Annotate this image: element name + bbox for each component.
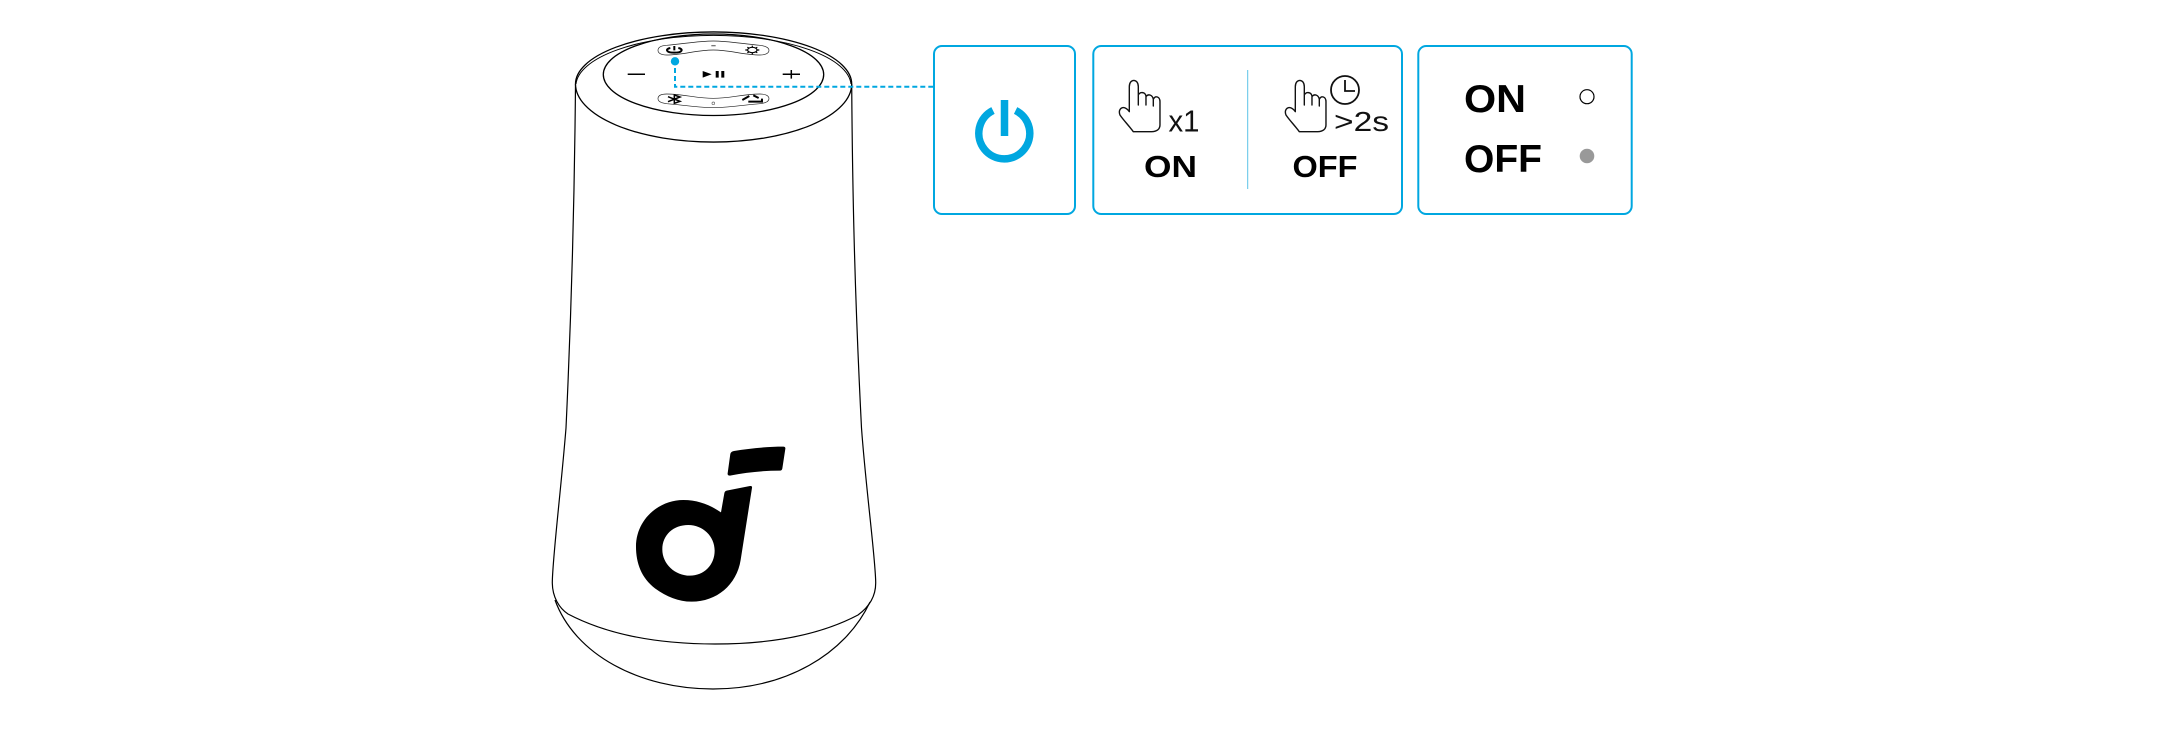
icon: light bbox=[745, 46, 759, 54]
speaker body bbox=[552, 84, 876, 644]
label: ON: ON bbox=[1144, 149, 1197, 184]
icon: clock bbox=[1331, 76, 1359, 104]
icon: long press hand bbox=[1285, 80, 1326, 132]
icon: bluetooth bbox=[668, 95, 680, 103]
icon: small power bbox=[667, 46, 682, 53]
indicator: open circle bbox=[1580, 90, 1594, 104]
label: ON: ON bbox=[1464, 78, 1526, 121]
upper button pill bbox=[658, 41, 769, 55]
plus bbox=[783, 70, 800, 79]
speaker illustration bbox=[552, 32, 876, 689]
indicator dot bbox=[671, 57, 679, 66]
speaker logo bbox=[636, 447, 785, 602]
speaker top lid bbox=[576, 32, 852, 142]
play pause bbox=[703, 71, 724, 78]
panel: press actions bbox=[1093, 46, 1402, 214]
minus bbox=[628, 73, 645, 75]
icon: power bbox=[979, 100, 1030, 159]
callout leader: dashed line bbox=[671, 57, 934, 87]
logo bar bbox=[728, 447, 785, 476]
panel: power button bbox=[934, 46, 1075, 214]
icon: single press hand bbox=[1119, 80, 1160, 132]
indicator dot bbox=[712, 102, 715, 105]
label: x1: x1 bbox=[1168, 104, 1200, 138]
lower button pill bbox=[658, 94, 769, 108]
logo note bbox=[636, 486, 752, 602]
panel: LED legend bbox=[1418, 46, 1632, 214]
speaker base bbox=[555, 600, 870, 689]
divider bbox=[1247, 70, 1248, 189]
control ring bbox=[603, 34, 824, 115]
label: >2s: >2s bbox=[1334, 106, 1389, 137]
icon: loop bbox=[742, 95, 762, 102]
indicator: grey circle bbox=[1580, 149, 1594, 163]
label: OFF: OFF bbox=[1292, 149, 1358, 184]
label: OFF: OFF bbox=[1464, 138, 1542, 181]
indicator slot bbox=[711, 45, 716, 46]
